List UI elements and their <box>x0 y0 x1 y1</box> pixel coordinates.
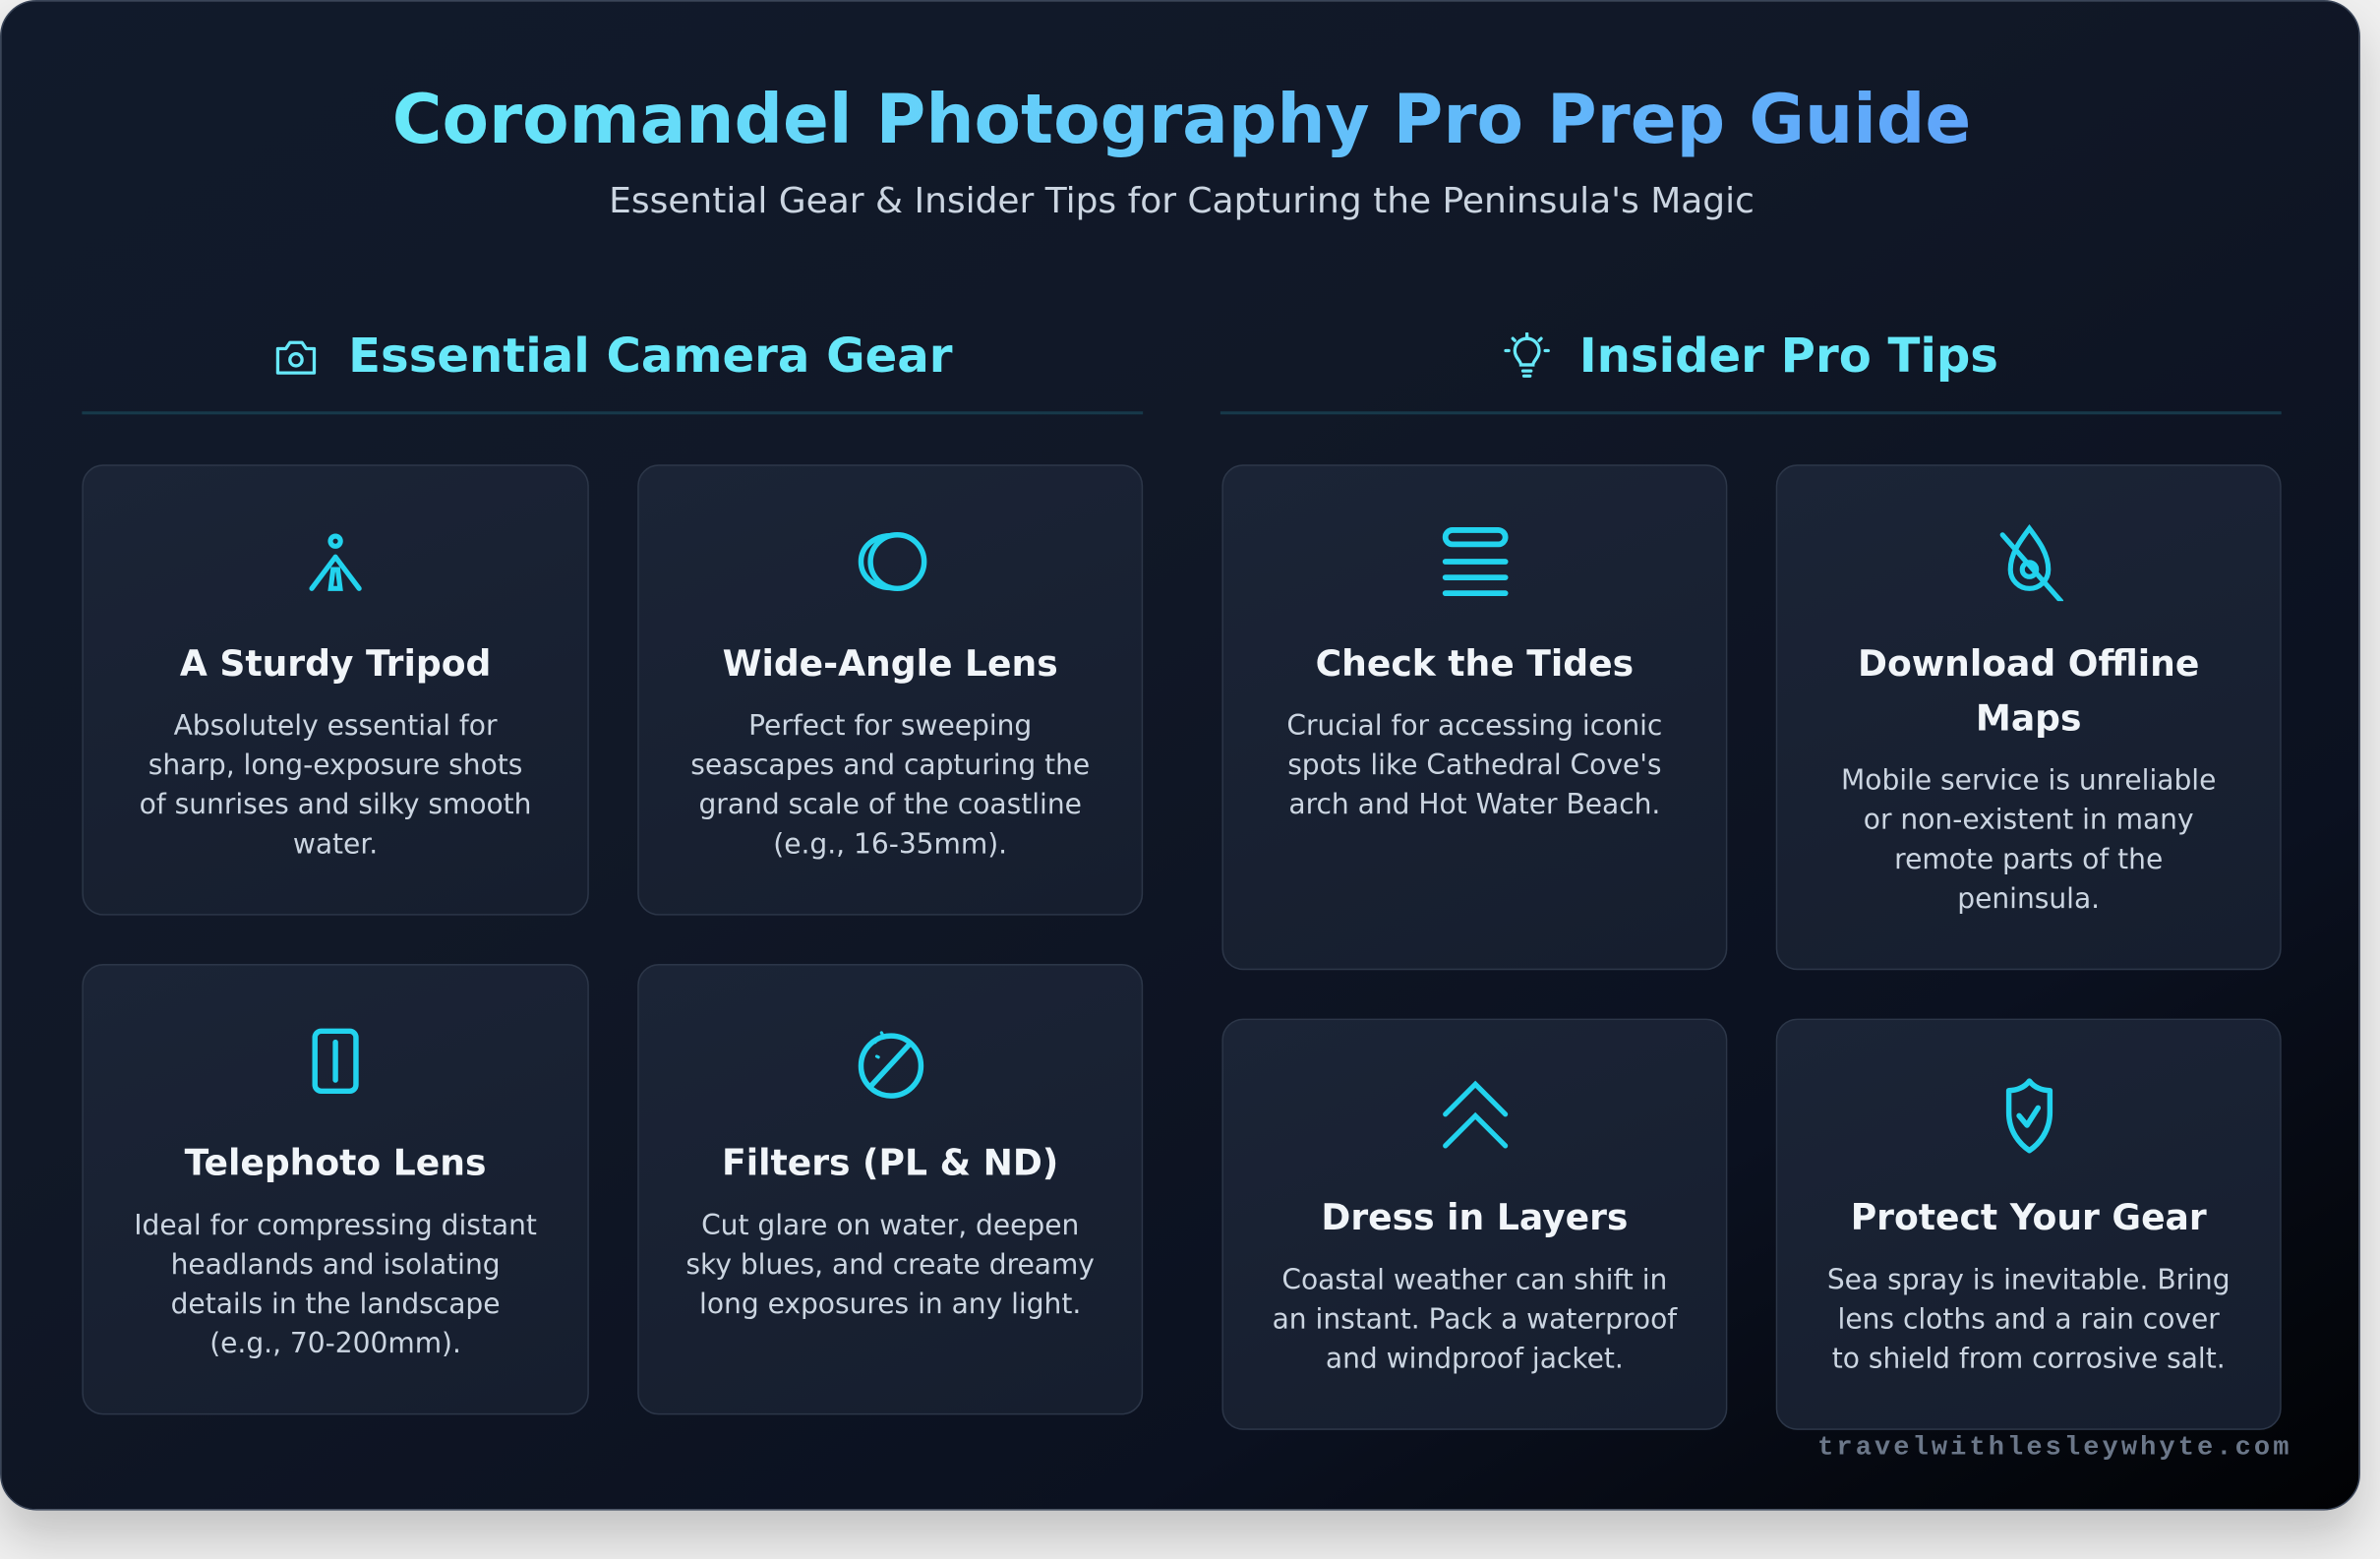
card: Download Offline Maps: Mobile service is unreliable <box>1841 765 2216 797</box>
card: Wide-Angle Lens: grand scale of the coastline <box>698 790 1082 821</box>
card: Telephoto Lens: headlands and isolating <box>171 1249 501 1282</box>
card: Download Offline Maps: Download Offline <box>1858 642 2199 685</box>
card: Dress in Layers <box>1221 1019 1727 1430</box>
icon: wide lens <box>858 532 926 591</box>
card: Telephoto Lens: Ideal for compressing distant <box>134 1210 537 1241</box>
card: Download Offline Maps: or non-existent in many <box>1864 805 2194 836</box>
card: Filters: long exposures in any light. <box>699 1289 1081 1321</box>
card: Check the Tides: spots like Cathedral Cove's <box>1287 750 1662 782</box>
card: Filters: sky blues, and create dreamy <box>685 1249 1095 1282</box>
icon: telephoto <box>313 1029 359 1094</box>
card: A Sturdy Tripod: water. <box>293 829 378 861</box>
card: Protect Your Gear: to shield from corrosive salt. <box>1832 1344 2226 1375</box>
icon: filter <box>858 1031 924 1099</box>
card: Download Offline Maps: Maps <box>1976 696 2082 740</box>
card: Protect Your Gear: lens cloths and a rain cover <box>1838 1304 2220 1336</box>
footer: website: travelwithlesleywhyte.com <box>1817 1433 2291 1464</box>
card: Telephoto Lens <box>82 964 589 1414</box>
card: Download Offline Maps <box>1776 464 2282 970</box>
heading: Insider Pro Tips: Insider Pro Tips <box>1579 330 1998 384</box>
card: Wide-Angle Lens: (e.g., 16-35mm). <box>773 829 1007 861</box>
card: Protect Your Gear <box>1776 1019 2282 1430</box>
card: Check the Tides: Crucial for accessing iconic <box>1286 710 1662 743</box>
card: Wide-Angle Lens: seascapes and capturing the <box>690 750 1090 782</box>
icon: offline map <box>2000 524 2063 602</box>
icon: shield check <box>2006 1078 2053 1153</box>
heading: Essential Camera Gear: Essential Camera Gear <box>348 330 952 384</box>
card: A Sturdy Tripod <box>82 464 589 916</box>
card: A Sturdy Tripod: sharp, long-exposure shots <box>149 750 522 782</box>
icon: layers chevrons <box>1443 1080 1509 1149</box>
card: Filters <box>637 964 1143 1414</box>
title: Coromandel Photography Pro Prep Guide <box>392 79 1971 159</box>
card: A Sturdy Tripod: Absolutely essential for <box>174 710 498 743</box>
subtitle: Essential Gear & Insider Tips for Capturing the Peninsula's Magic <box>609 181 1755 221</box>
card: Telephoto Lens: Telephoto Lens <box>185 1142 486 1184</box>
card: Filters: Filters (PL & ND) <box>722 1142 1058 1184</box>
card: A Sturdy Tripod: A Sturdy Tripod <box>180 642 491 685</box>
card: Dress in Layers: Dress in Layers <box>1321 1196 1628 1238</box>
card: Protect Your Gear: Protect Your Gear <box>1851 1196 2207 1238</box>
icon: tripod <box>309 533 362 591</box>
card: Dress in Layers: Coastal weather can shift in <box>1281 1265 1667 1296</box>
card: Wide-Angle Lens: Wide-Angle Lens <box>723 642 1058 685</box>
card: Wide-Angle Lens: Perfect for sweeping <box>748 710 1032 743</box>
card: Protect Your Gear: Sea spray is inevitable. Bring <box>1827 1265 2231 1296</box>
icon: camera <box>275 340 317 375</box>
card: Download Offline Maps: remote parts of the <box>1894 844 2163 876</box>
card: A Sturdy Tripod: of sunrises and silky smooth <box>140 790 531 821</box>
card: Dress in Layers: and windproof jacket. <box>1326 1344 1624 1375</box>
card: Telephoto Lens: details in the landscape <box>171 1289 501 1321</box>
card: Wide-Angle Lens <box>637 464 1143 916</box>
card: Telephoto Lens: (e.g., 70-200mm). <box>209 1328 461 1360</box>
card: Download Offline Maps: peninsula. <box>1957 883 2100 916</box>
card: Check the Tides: Check the Tides <box>1316 642 1634 685</box>
icon: lightbulb <box>1504 332 1550 378</box>
card: Filters: Cut glare on water, deepen <box>701 1210 1079 1241</box>
card: Check the Tides: arch and Hot Water Beach. <box>1288 790 1660 821</box>
icon: tides <box>1442 527 1509 596</box>
card: Check the Tides <box>1221 464 1727 970</box>
card: Dress in Layers: an instant. Pack a waterproof <box>1273 1304 1677 1336</box>
